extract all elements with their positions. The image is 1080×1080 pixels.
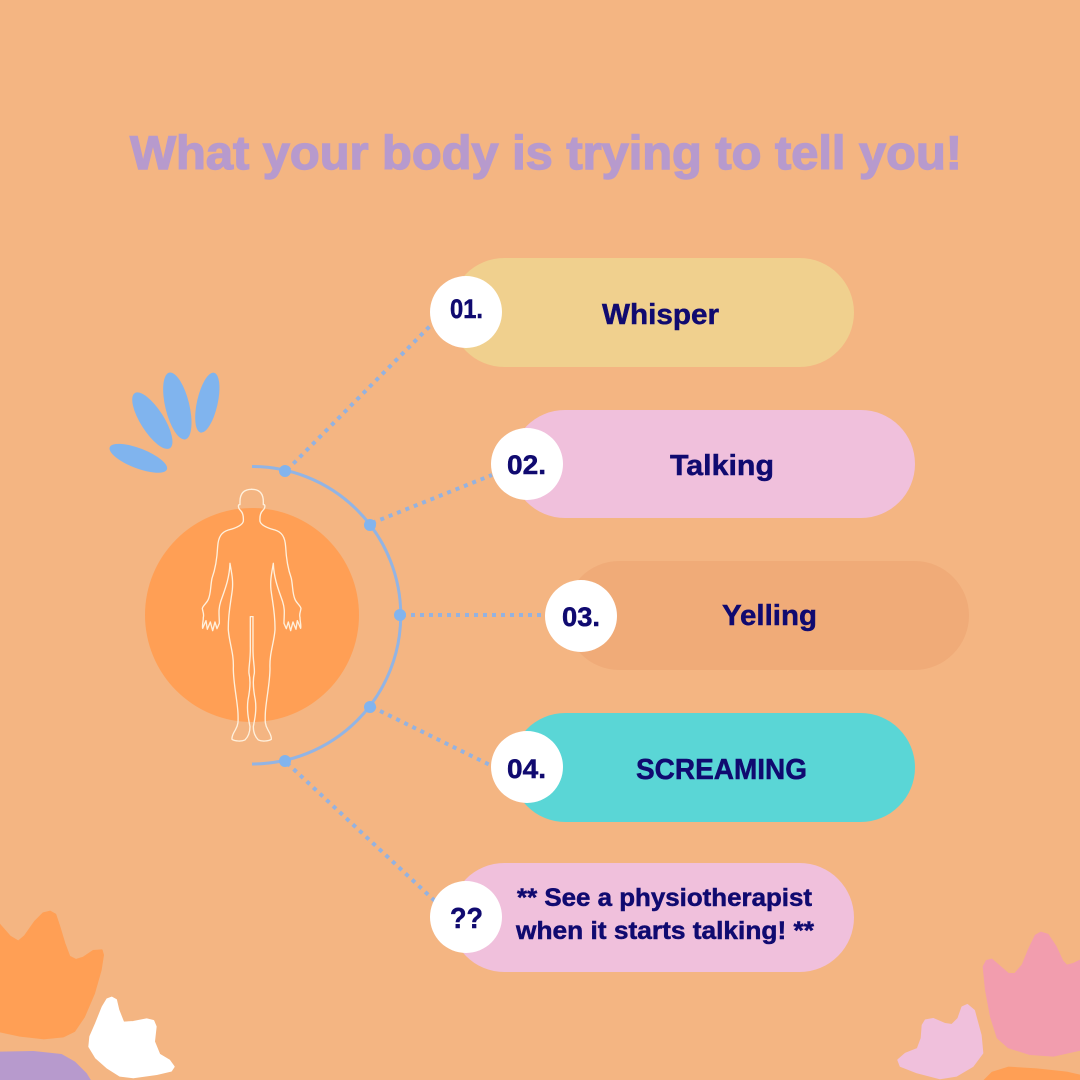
title: What your body is trying to tell you! [130, 126, 962, 179]
item 03: Yelling: Yelling [722, 600, 817, 632]
icon: human body outline [202, 489, 301, 741]
connector arc with nodes [252, 324, 545, 902]
item ??: physiotherapist note [430, 863, 854, 972]
item 01: Whisper [430, 258, 854, 367]
item 02: Talking [491, 410, 915, 518]
item 04: SCREAMING: SCREAMING [636, 754, 807, 786]
item 01: Whisper: 01. [450, 294, 483, 324]
decoration: bottom-left leaves [0, 912, 174, 1080]
item ??: physiotherapist note: when it starts talking! ** [515, 917, 814, 945]
item 02: Talking: 02. [507, 450, 546, 480]
item 04: SCREAMING: 04. [507, 754, 546, 784]
item 04: SCREAMING [491, 713, 915, 822]
item 02: Talking: Talking [670, 450, 774, 482]
item ??: physiotherapist note: ** See a physiotherapist [517, 884, 813, 912]
decoration: bottom-right leaves [898, 933, 1080, 1080]
item 03: Yelling [545, 561, 969, 670]
item 01: Whisper: Whisper [602, 299, 719, 331]
body circle [145, 508, 359, 722]
item 03: Yelling: 03. [562, 602, 600, 632]
item ??: physiotherapist note: ?? [450, 903, 483, 935]
icon: blue splash [106, 370, 224, 479]
